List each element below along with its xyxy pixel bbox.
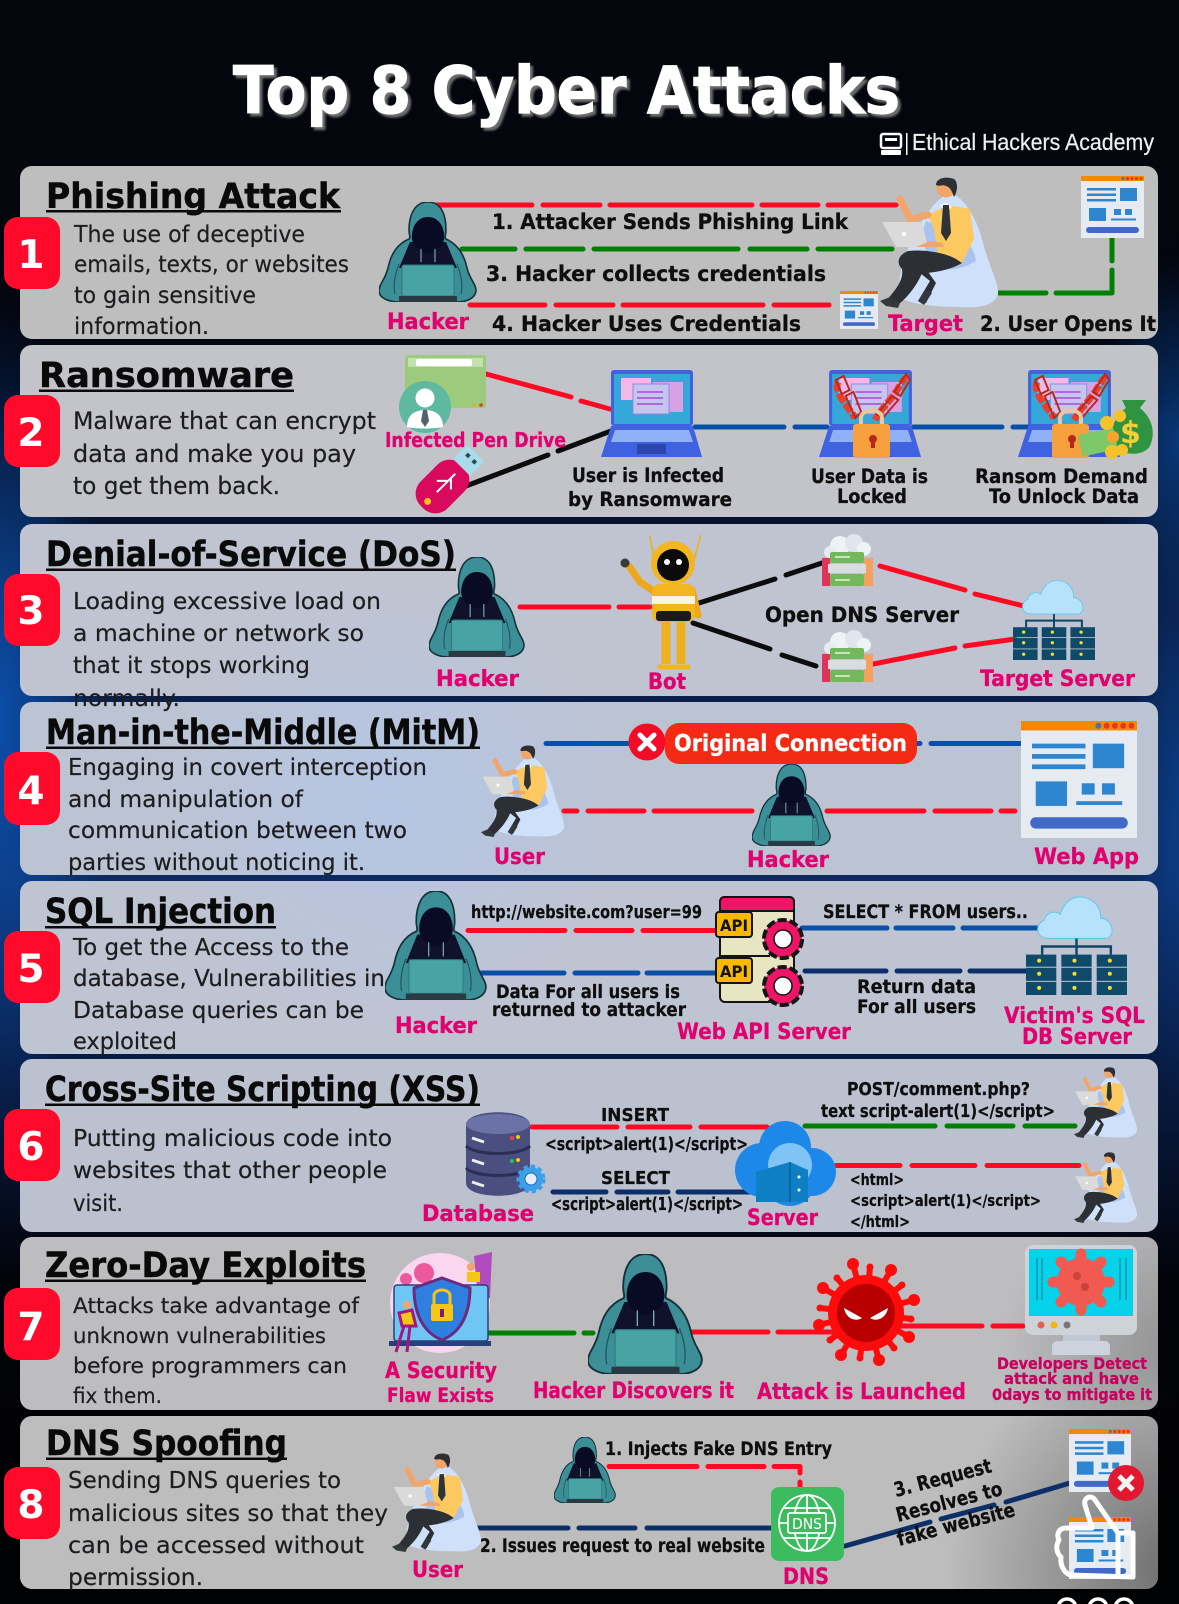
actor labels: Database — [422, 1202, 534, 1227]
description: a machine or network so — [73, 619, 364, 647]
badge 4: 4 — [17, 769, 45, 814]
step labels: To Unlock Data — [989, 485, 1139, 508]
description: unknown vulnerabilities — [73, 1324, 326, 1349]
arrow: original connection — [546, 741, 1020, 746]
description: Putting malicious code into — [73, 1124, 392, 1152]
actor labels: User — [412, 1558, 463, 1583]
actor labels — [422, 1202, 818, 1231]
panel: dns spoofing — [4, 1416, 1158, 1591]
icon: user victim — [1074, 1152, 1137, 1223]
icon: user — [481, 745, 564, 837]
step labels: by Ransomware — [568, 488, 732, 511]
flow labels: <script>alert(1)</script> — [850, 1191, 1041, 1210]
stage labels: A Security — [385, 1359, 497, 1384]
description: before programmers can — [73, 1354, 347, 1379]
icon: hacker — [554, 1437, 615, 1503]
actor labels — [436, 667, 1135, 695]
rotated label: request resolves to fake website: Resolves to — [893, 1476, 1005, 1527]
label: infected pen drive: Infected Pen Drive — [385, 428, 566, 452]
flow labels — [545, 1080, 1055, 1231]
rotated label: request resolves to fake website: 3. Request — [891, 1453, 994, 1502]
panel: cross site scripting — [4, 1059, 1158, 1232]
title: Top 8 Cyber Attacks — [233, 54, 900, 129]
arrow: hacker collects credentials — [462, 246, 892, 252]
icon: security flaw — [389, 1252, 492, 1353]
badge 1: 1 — [17, 233, 45, 278]
icon: target server — [1013, 580, 1095, 660]
actor labels — [395, 1004, 1145, 1050]
actor labels — [412, 1558, 829, 1590]
description — [73, 407, 376, 500]
badge: original connection — [665, 723, 917, 764]
step labels: 4. Hacker Uses Credentials — [492, 312, 801, 336]
icon: web app — [1021, 721, 1137, 838]
icon: ransom laptop with money — [1018, 370, 1153, 459]
description: and manipulation of — [68, 785, 304, 813]
stage labels — [385, 1354, 1152, 1407]
description — [73, 1294, 359, 1409]
description: Malware that can encrypt — [73, 407, 376, 435]
icon: target user — [880, 178, 998, 308]
description: communication between two — [68, 816, 407, 844]
description: The use of deceptive — [73, 220, 305, 248]
arrows: xss flow — [532, 1126, 1079, 1192]
description: permission. — [68, 1563, 203, 1591]
flow labels: http://website.com?user=99 — [471, 903, 702, 923]
stage labels: Flaw Exists — [387, 1384, 494, 1407]
actor labels: Hacker — [395, 1014, 477, 1039]
actor labels: Victim's SQL — [1004, 1004, 1145, 1029]
step labels: 1. Attacker Sends Phishing Link — [492, 210, 849, 234]
text: dos description overflow line: normally. — [73, 684, 180, 712]
arrows: infection paths — [466, 374, 1030, 486]
flow labels: For all users — [857, 996, 976, 1018]
description: Sending DNS queries to — [68, 1466, 341, 1494]
badge 2: 2 — [17, 411, 45, 456]
heading: dns spoofing: DNS Spoofing — [46, 1424, 287, 1464]
heading: man in the middle: Man-in-the-Middle (MitM) — [46, 713, 480, 753]
arrow: intercepted connection — [564, 808, 1015, 814]
label: open dns server: Open DNS Server — [765, 603, 960, 627]
actor labels — [494, 845, 1139, 873]
icon: web api server — [716, 897, 802, 1005]
step labels: 3. Hacker collects credentials — [486, 262, 826, 286]
description: can be accessed without — [68, 1531, 364, 1559]
flow labels: <html> — [850, 1170, 904, 1189]
arrows: dns flow — [477, 1466, 1070, 1546]
actor labels: Hacker — [436, 667, 519, 692]
description — [72, 933, 385, 1055]
badge 5 — [4, 931, 60, 1003]
description: to get them back. — [73, 472, 280, 500]
actor labels: DB Server — [1022, 1025, 1132, 1050]
step labels: 2. User Opens It — [980, 312, 1156, 336]
icon: hacker — [429, 557, 524, 657]
icon: infected browser — [399, 355, 486, 433]
description: information. — [74, 312, 209, 340]
flow labels: 1. Injects Fake DNS Entry — [605, 1439, 832, 1460]
icon: usb pen drive — [409, 440, 489, 520]
arrows: zero day flow — [486, 1326, 1023, 1333]
icon: hacker — [385, 891, 486, 1000]
stage labels: 0days to mitigate it — [992, 1385, 1152, 1404]
icon: database — [466, 1112, 543, 1196]
flow labels — [480, 1439, 832, 1557]
flow labels: returned to attacker — [492, 999, 687, 1021]
arrows: sql flow — [468, 928, 1037, 973]
badge 3: 3 — [17, 589, 45, 634]
panel: ransomware — [4, 345, 1158, 520]
description: Attacks take advantage of — [73, 1294, 359, 1319]
badge 1 — [4, 217, 60, 289]
description: that it stops working — [73, 651, 310, 679]
icon: hacker — [588, 1254, 702, 1374]
rotated label: request resolves to fake website — [891, 1453, 1017, 1551]
arrow: attacker sends link — [437, 202, 896, 208]
icon: dns globe: DNS — [792, 1515, 822, 1533]
stage labels: Hacker Discovers it — [533, 1379, 734, 1404]
icon: open dns server top — [822, 534, 873, 586]
icon: cloud server — [735, 1121, 836, 1206]
badge 8 — [4, 1467, 60, 1539]
icon: thumbs up — [1057, 1497, 1133, 1577]
flow labels: Data For all users is — [496, 981, 680, 1003]
badge 7: 7 — [17, 1305, 45, 1350]
description — [68, 753, 427, 876]
step labels: Ransom Demand — [975, 465, 1148, 488]
description: Engaging in covert interception — [68, 753, 427, 781]
icon: open dns server bottom — [822, 630, 873, 682]
badge 7 — [4, 1288, 60, 1360]
icon: user — [392, 1453, 481, 1552]
icon: user sender — [1074, 1067, 1137, 1138]
flow labels: POST/comment.php? — [847, 1080, 1030, 1100]
actor labels: Hacker — [387, 310, 469, 335]
description: fix them. — [73, 1384, 162, 1409]
description: database, Vulnerabilities in — [73, 964, 385, 992]
panel: sql injection — [4, 881, 1158, 1055]
flow labels: 2. Issues request to real website — [480, 1536, 765, 1557]
flow labels — [471, 902, 1028, 1021]
flow labels: <script>alert(1)</script> — [551, 1195, 743, 1215]
actor labels: Target — [888, 312, 963, 337]
description: websites that other people — [73, 1156, 387, 1184]
panel: man in the middle — [4, 702, 1158, 876]
icon: victim db server — [1026, 897, 1127, 995]
heading: zero day: Zero-Day Exploits — [45, 1246, 366, 1286]
description: emails, texts, or websites — [74, 250, 349, 278]
description — [68, 1466, 388, 1591]
badge 5: 5 — [17, 947, 45, 992]
badge 3 — [4, 574, 60, 646]
panel: denial of service — [4, 524, 1158, 696]
icon: ransom laptop with money: $ — [1120, 416, 1141, 451]
badge 6 — [4, 1109, 60, 1181]
flow labels: text script-alert(1)</script> — [821, 1102, 1055, 1122]
description: parties without noticing it. — [68, 848, 365, 876]
actor labels: Web App — [1034, 845, 1139, 870]
heading: xss: Cross-Site Scripting (XSS) — [45, 1070, 480, 1110]
step labels — [486, 210, 1156, 336]
icon: bot — [620, 535, 701, 667]
step labels: User Data is — [811, 465, 928, 488]
icon: hacker — [379, 202, 476, 302]
icon: infected laptop — [601, 370, 702, 457]
badge: original connection: Original Connection — [674, 731, 907, 757]
actor labels: DNS — [783, 1565, 829, 1590]
badge 2 — [4, 395, 60, 467]
icon: hacker — [752, 764, 830, 846]
actor labels: Web API Server — [677, 1020, 851, 1045]
rotated label: request resolves to fake website: fake website — [894, 1497, 1017, 1551]
icon: more dots — [1058, 1599, 1133, 1604]
description: To get the Access to the — [72, 933, 349, 961]
heading: denial of service: Denial-of-Service (DoS) — [46, 535, 456, 575]
description: Database queries can be — [73, 996, 364, 1024]
description: Loading excessive load on — [73, 587, 381, 615]
flow labels: SELECT * FROM users.. — [823, 902, 1028, 923]
description — [73, 1124, 392, 1217]
icon: blocked x — [628, 724, 666, 760]
arrow: user opens it — [995, 236, 1112, 293]
actor labels: Hacker — [747, 848, 829, 873]
icon: real web page — [1069, 1429, 1131, 1492]
badge 6: 6 — [17, 1125, 45, 1170]
icon: rejected x — [1108, 1465, 1144, 1501]
step labels — [568, 464, 1148, 511]
actor labels — [387, 310, 963, 337]
arrow: hacker uses credentials — [470, 302, 829, 308]
description: malicious sites so that they — [68, 1499, 388, 1527]
brand: Ethical Hackers Academy: Ethical Hackers Academy — [912, 129, 1154, 155]
flow labels: INSERT — [601, 1106, 669, 1126]
step labels: Locked — [837, 485, 907, 508]
actor labels: Bot — [648, 670, 686, 695]
actor labels: Target Server — [980, 667, 1135, 692]
icon: monitor with virus — [1025, 1245, 1137, 1355]
icon: fake web page — [1069, 1517, 1131, 1579]
description: exploited — [73, 1027, 177, 1055]
arrows: dos traffic — [520, 563, 1024, 666]
panel: phishing attack — [4, 166, 1158, 340]
icon: large web page — [1081, 176, 1144, 238]
description: to gain sensitive — [74, 281, 256, 309]
flow labels: SELECT — [601, 1169, 670, 1189]
icon: dns globe — [771, 1487, 844, 1561]
step labels: User is Infected — [572, 464, 724, 487]
heading: phishing attack: Phishing Attack — [46, 177, 341, 217]
icon: locked laptop — [819, 370, 921, 458]
icon: small web page — [840, 291, 878, 329]
badge 8: 8 — [17, 1483, 45, 1528]
stage labels: Developers Detect — [997, 1354, 1147, 1373]
description: data and make you pay — [73, 440, 356, 468]
actor labels: User — [494, 845, 545, 870]
description — [73, 220, 349, 340]
description — [73, 587, 381, 679]
panel: zero day exploits — [4, 1237, 1158, 1410]
flow labels: <script>alert(1)</script> — [545, 1135, 748, 1155]
heading: ransomware: Ransomware — [39, 356, 294, 396]
icon: virus — [813, 1258, 920, 1366]
icon: web api server: API — [720, 916, 748, 935]
stage labels: Attack is Launched — [757, 1380, 966, 1405]
description: visit. — [73, 1189, 123, 1217]
icon: web api server: API — [720, 962, 748, 981]
actor labels: Server — [747, 1206, 818, 1231]
heading: sql injection: SQL Injection — [45, 892, 276, 932]
flow labels: </html> — [850, 1212, 910, 1231]
badge 4 — [4, 752, 60, 825]
flow labels: Return data — [857, 976, 976, 998]
stage labels: attack and have — [1004, 1369, 1139, 1388]
